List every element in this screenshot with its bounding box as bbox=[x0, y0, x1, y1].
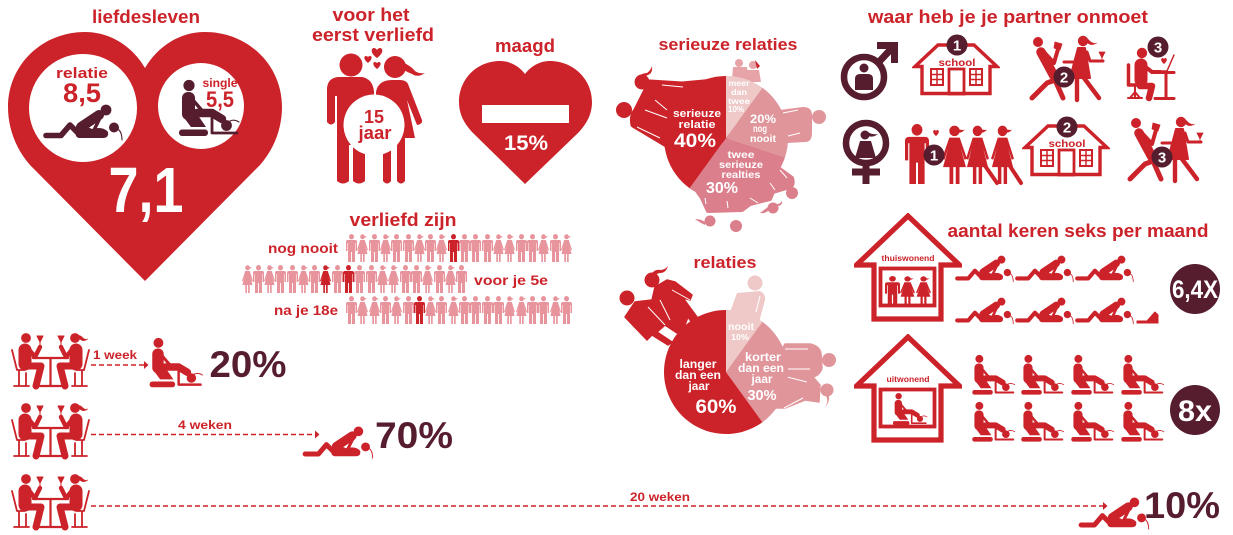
pie chart: dan bbox=[731, 88, 747, 97]
pie chart: 40% bbox=[674, 131, 716, 152]
callout: 15 jaar: jaar bbox=[357, 123, 392, 143]
single circle: single bbox=[202, 76, 238, 90]
panel: verliefd zijn bbox=[242, 210, 572, 324]
icon grid: uitwonend bbox=[972, 355, 1164, 442]
heading: relaties: relaties bbox=[694, 253, 756, 272]
heading: aantal keren seks per maand bbox=[948, 221, 1208, 241]
pictogram row: voor je 5e bbox=[242, 265, 467, 293]
pie chart: jaar bbox=[688, 379, 710, 393]
label: na je 18e: na je 18e bbox=[274, 302, 338, 318]
pie chart: korter bbox=[745, 350, 781, 364]
heart: liefdesleven bbox=[8, 7, 282, 281]
badge: 6,4x: 6,4X bbox=[1172, 276, 1218, 304]
bar scene 2: 2 bbox=[1060, 70, 1068, 86]
panel: relaties bbox=[620, 253, 836, 434]
label: nog nooit: nog nooit bbox=[268, 240, 338, 256]
arrow: 1 week bbox=[91, 350, 148, 369]
heading: voor het eerst verliefd bbox=[312, 5, 434, 45]
group scene 1 bbox=[905, 124, 1021, 184]
relatie circle bbox=[29, 54, 137, 162]
pie chart: 10% bbox=[728, 105, 744, 114]
heading: liefdesleven: liefdesleven bbox=[92, 7, 200, 27]
icon: couple at table bbox=[12, 474, 89, 527]
school 2 bbox=[1025, 116, 1107, 175]
heading: serieuze relaties: serieuze relaties bbox=[658, 35, 798, 54]
badge: 6,4x bbox=[1170, 264, 1220, 314]
bar scene 3 bbox=[1130, 117, 1203, 181]
callout: 15 jaar bbox=[344, 94, 404, 156]
pie chart: 30% bbox=[748, 387, 776, 404]
arrow: 4 weken: 4 weken bbox=[178, 420, 232, 432]
pie chart: dan een bbox=[675, 368, 721, 382]
percentage 70%: 70% bbox=[375, 415, 453, 456]
arrow: 20 weken: 20 weken bbox=[630, 492, 690, 504]
school 1 bbox=[915, 34, 997, 94]
callout: 15 jaar: 15 bbox=[364, 107, 384, 127]
pie chart: serieuze bbox=[673, 108, 721, 120]
figures: red couple 60% bbox=[620, 266, 697, 345]
panel: waar heb je je partner onmoet bbox=[844, 7, 1203, 184]
figures: light group 10% bbox=[732, 59, 761, 82]
relatie circle: relatie bbox=[56, 65, 108, 82]
pie chart: 10% bbox=[731, 332, 749, 342]
pie chart: realties bbox=[722, 169, 761, 181]
pie chart: twee bbox=[728, 149, 755, 161]
school 2: school bbox=[1048, 138, 1086, 150]
icon: couple with hearts bbox=[327, 48, 425, 184]
single circle: 5,5 bbox=[206, 87, 234, 112]
timeline: 4 weken 70% bbox=[12, 403, 453, 458]
bar scene 3: 3 bbox=[1158, 150, 1166, 166]
badge: 8x bbox=[1170, 385, 1220, 435]
heading: verliefd zijn: verliefd zijn bbox=[350, 210, 456, 230]
pie chart: twee bbox=[728, 97, 751, 106]
heading: voor het eerst verliefd: eerst verliefd bbox=[312, 25, 434, 45]
panel: voor het eerst verliefd bbox=[312, 5, 434, 184]
heart bbox=[459, 61, 592, 184]
pie chart: nooit bbox=[750, 134, 777, 145]
figures: pink couple 30% bbox=[770, 344, 836, 408]
percentage: 15% bbox=[504, 132, 548, 155]
white bar bbox=[482, 105, 569, 123]
pie chart: 20% bbox=[750, 112, 776, 126]
pictogram row: na je 18e bbox=[346, 296, 572, 324]
icon: couple at table bbox=[12, 333, 89, 386]
icon: couple at table bbox=[12, 403, 89, 456]
panel: aantal keren seks per maand bbox=[856, 216, 1220, 442]
school 2: 2 bbox=[1063, 120, 1071, 136]
label: voor je 5e: voor je 5e bbox=[474, 272, 548, 288]
pie chart: meer bbox=[728, 79, 750, 88]
icon: male symbol bbox=[844, 42, 898, 97]
computer scene 3 bbox=[1128, 36, 1174, 98]
badge: 8x: 8x bbox=[1178, 395, 1212, 428]
arrow: 20 weken bbox=[91, 492, 1108, 510]
figures: pink person 20% bbox=[772, 108, 826, 146]
pie chart: 60% bbox=[696, 397, 737, 418]
pie chart: dan een bbox=[738, 361, 784, 375]
timeline: 1 week 20% bbox=[12, 333, 286, 387]
bar scene 2 bbox=[1032, 36, 1105, 100]
figures: pink couple 30% bbox=[695, 162, 798, 232]
house: uitwonend bbox=[856, 337, 960, 440]
pictogram row: nog nooit bbox=[346, 234, 572, 262]
percentage 20%: 20% bbox=[210, 344, 286, 385]
heading: voor het eerst verliefd: voor het bbox=[332, 5, 410, 25]
pie chart: jaar bbox=[751, 372, 773, 386]
icon: couple bbox=[150, 338, 202, 387]
score 7,1: 7,1 bbox=[108, 154, 184, 226]
icon row: thuiswonend bbox=[957, 256, 1158, 324]
computer scene 3: 3 bbox=[1154, 40, 1162, 56]
panel: serieuze relaties bbox=[616, 35, 826, 232]
pie chart bbox=[664, 76, 788, 200]
pie chart bbox=[664, 310, 788, 434]
icon: couple bbox=[305, 427, 373, 458]
school 1: school bbox=[938, 57, 976, 69]
house: thuiswonend bbox=[856, 216, 960, 319]
heading: maagd: maagd bbox=[495, 36, 555, 56]
percentage 10%: 10% bbox=[1144, 485, 1220, 526]
icon: couple bbox=[1081, 498, 1149, 529]
pie chart: nog bbox=[753, 124, 767, 135]
single circle bbox=[158, 63, 244, 149]
figures: red couple 40% bbox=[616, 66, 726, 146]
panel: maagd bbox=[459, 36, 592, 184]
pie chart: langer bbox=[680, 357, 717, 371]
pie chart: nooit bbox=[728, 322, 755, 333]
arrow: 1 week: 1 week bbox=[93, 350, 138, 362]
figures: light person 10% bbox=[728, 276, 765, 326]
heading: waar heb je je partner onmoet bbox=[867, 7, 1148, 27]
house: thuiswonend: thuiswonend bbox=[882, 254, 935, 263]
arrow: 4 weken bbox=[91, 420, 320, 438]
pie chart: relatie bbox=[678, 119, 716, 131]
pie chart: serieuze bbox=[719, 159, 763, 171]
house: uitwonend: uitwonend bbox=[886, 375, 930, 384]
icon: female symbol bbox=[846, 123, 886, 184]
relatie circle: 8,5 bbox=[63, 78, 101, 108]
school 1: 1 bbox=[953, 38, 961, 54]
pie chart: 30% bbox=[706, 180, 738, 197]
large red heart bbox=[8, 32, 282, 281]
group scene 1: 1 bbox=[930, 148, 938, 164]
timeline: 20 weken 10% bbox=[12, 474, 1220, 529]
